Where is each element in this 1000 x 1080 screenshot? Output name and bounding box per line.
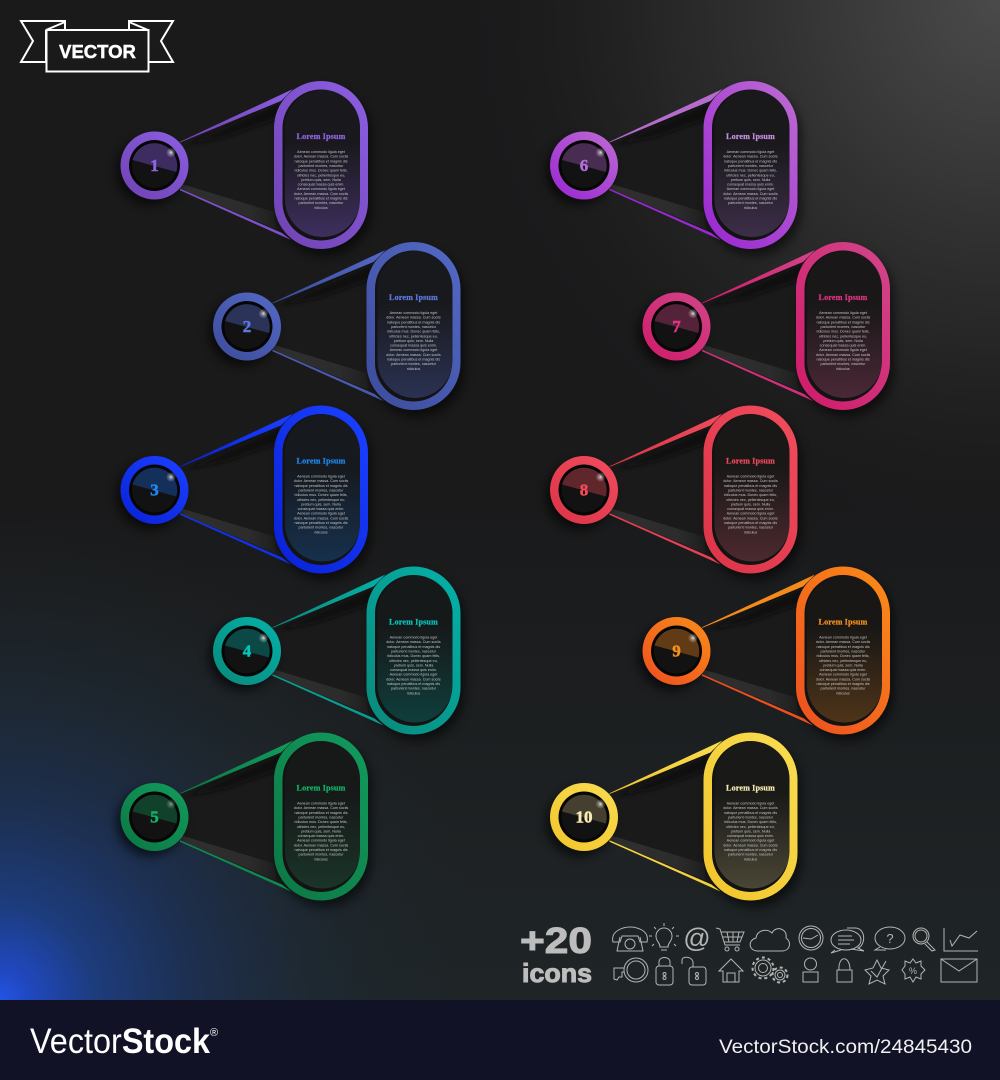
panel: step 9: ridiculus — [836, 691, 850, 695]
panel: step 3: ridiculus — [314, 530, 328, 534]
icon set — [613, 923, 978, 985]
panel: step 5: natoque penatibus et magnis dis — [294, 848, 348, 852]
icon: open padlock — [682, 957, 706, 985]
panel: step 4: ultricies nec, pellentesque eu, — [389, 659, 438, 663]
panel: step 8: parturient montes, nascetur — [728, 488, 774, 492]
icon: percent badge — [902, 959, 925, 982]
heading: +20 icons — [520, 920, 592, 988]
panel: step 5: pretium quis, sem. Nulla — [301, 829, 342, 833]
panel: step 3: 3 — [150, 480, 159, 500]
panel: step 2: natoque penatibus et magnis dis — [387, 358, 440, 362]
panel: step 6: parturient montes, nascetur — [728, 164, 774, 168]
panel: step 7: consequat massa quis enim. — [820, 344, 866, 348]
panel: step 2: Lorem Ipsum — [389, 293, 438, 302]
panel: step 8: ridiculus — [744, 530, 757, 534]
panel: step 6: consequat massa quis enim. — [727, 183, 774, 187]
panel: step 1: 1 — [150, 156, 159, 175]
panel: step 9: dolor. Aenean massa. Cum sociis — [816, 677, 870, 681]
panel: step 3: consequat massa quis enim. — [298, 507, 344, 511]
panel: step 4: Lorem Ipsum — [389, 618, 438, 626]
panel: step 4: natoque penatibus et magnis dis — [387, 682, 440, 686]
panel: step 1: ultricies nec, pellentesque eu, — [297, 173, 345, 177]
panel: step 7: Lorem Ipsum — [819, 293, 868, 302]
panel: step 10: dolor. Aenean massa. Cum sociis — [723, 843, 778, 847]
panel: step 8: ridiculus mus. Donec quam felis, — [724, 493, 777, 497]
panel: step 5: 5 — [150, 808, 159, 826]
panel: step 4 — [208, 566, 464, 742]
icon: question bubble — [875, 927, 905, 950]
panel: step 1 — [116, 81, 372, 256]
icon: percent badge: % — [909, 966, 917, 976]
panel: step 6 — [546, 81, 802, 256]
panel: step 9: Aenean commodo ligula eget — [819, 673, 867, 677]
panel: step 3: Aenean commodo ligula eget — [297, 512, 345, 516]
panel: step 10 — [546, 732, 802, 908]
panel: step 1: Aenean commodo ligula eget — [297, 187, 345, 191]
panel: step 2: dolor. Aenean massa. Cum sociis — [386, 353, 441, 357]
icon: clock — [799, 926, 823, 950]
panel: step 8: ultricies nec, pellentesque eu, — [726, 498, 775, 502]
footer bar — [0, 1000, 1000, 1080]
icon: cloud — [750, 929, 789, 951]
panel: step 6: Lorem Ipsum — [726, 132, 775, 141]
icon: question bubble: ? — [886, 931, 894, 946]
panel: step 9: consequat massa quis enim. — [820, 668, 866, 672]
panel: step 2 — [208, 242, 464, 417]
panel: step 10: natoque penatibus et magnis dis — [724, 811, 777, 815]
panel: step 4: natoque penatibus et magnis dis — [387, 645, 440, 649]
icon: star with check — [865, 960, 889, 984]
panel: step 3: pretium quis, sem. Nulla — [301, 502, 342, 506]
panel: step 1: Lorem Ipsum — [297, 132, 346, 141]
logo: VectorStock: VectorStock — [30, 1022, 210, 1061]
panel: step 10: consequat massa quis enim. — [727, 834, 774, 838]
panel: step 2: 2 — [243, 317, 251, 336]
panel: step 5: dolor. Aenean massa. Cum sociis — [294, 843, 348, 847]
icon: key — [614, 958, 648, 982]
panel: step 8: consequat massa quis enim. — [727, 507, 774, 511]
panel: step 1: Aenean commodo ligula eget — [297, 150, 345, 154]
panel: step 6: 6 — [580, 156, 588, 175]
panel: step 5: dolor. Aenean massa. Cum sociis — [294, 806, 348, 810]
icon: line chart — [944, 928, 978, 951]
panel: step 5 — [116, 732, 372, 908]
panel: step 1: natoque penatibus et magnis dis — [294, 196, 348, 200]
panel: step 8: dolor. Aenean massa. Cum sociis — [723, 516, 778, 520]
panel: step 1: dolor. Aenean massa. Cum sociis — [294, 155, 348, 159]
icon: gears — [752, 958, 788, 982]
panel: step 2: ridiculus — [407, 367, 420, 371]
icon: house — [719, 959, 743, 982]
panel: step 8: Aenean commodo ligula eget — [727, 512, 774, 516]
panel: step 4: Aenean commodo ligula eget — [390, 673, 437, 677]
panel: step 5: ridiculus mus. Donec quam felis, — [294, 820, 348, 824]
panel: step 7: ridiculus — [836, 367, 850, 371]
panel: step 2: natoque penatibus et magnis dis — [387, 320, 440, 324]
panel: step 7: ultricies nec, pellentesque eu, — [819, 334, 867, 338]
panel: step 3: ultricies nec, pellentesque eu, — [297, 498, 345, 502]
panel: step 8: dolor. Aenean massa. Cum sociis — [723, 479, 778, 483]
panel: step 5: parturient montes, nascetur — [299, 815, 344, 819]
icon: woman — [837, 959, 852, 982]
panel: step 4: ridiculus — [407, 691, 420, 695]
panel: step 3: natoque penatibus et magnis dis — [294, 521, 348, 525]
panel: step 3 — [116, 406, 372, 580]
panel: step 6: ultricies nec, pellentesque eu, — [726, 173, 775, 177]
panel: step 9: ridiculus mus. Donec quam felis, — [816, 654, 870, 658]
panel: step 3: dolor. Aenean massa. Cum sociis — [294, 479, 348, 483]
panel: step 7: natoque penatibus et magnis dis — [816, 320, 870, 324]
panel: step 10: Aenean commodo ligula eget — [727, 839, 774, 843]
panel: step 10: ridiculus mus. Donec quam felis, — [724, 820, 777, 824]
icon: envelope — [941, 959, 977, 982]
panel: step 6: ridiculus — [744, 206, 757, 210]
panel: step 2: parturient montes, nascetur — [391, 325, 437, 329]
panel: step 9: natoque penatibus et magnis dis — [816, 645, 870, 649]
icon: closed padlock — [656, 958, 673, 985]
panel: step 1: ridiculus mus. Donec quam felis, — [294, 169, 348, 173]
panel: step 8: natoque penatibus et magnis dis — [724, 521, 777, 525]
panel: step 10: dolor. Aenean massa. Cum sociis — [723, 806, 778, 810]
panel: step 4: dolor. Aenean massa. Cum sociis — [386, 677, 441, 681]
panel: step 8: Lorem Ipsum — [726, 456, 775, 466]
icon: telephone — [613, 927, 647, 951]
panel: step 2: ridiculus mus. Donec quam felis, — [387, 330, 440, 334]
panel: step 6: natoque penatibus et magnis dis — [724, 196, 777, 200]
panel: step 7: Aenean commodo ligula eget — [819, 311, 867, 315]
panel: step 1: ridiculus — [314, 206, 328, 210]
panel: step 5: Aenean commodo ligula eget — [297, 839, 345, 843]
icon: shopping cart — [716, 928, 744, 951]
logo: registered mark: ® — [210, 1027, 218, 1039]
panel: step 2: parturient montes, nascetur — [391, 362, 437, 366]
panel: step 9: 9 — [672, 642, 681, 660]
panel: step 3: parturient montes, nascetur — [299, 488, 344, 492]
panel: step 9: Aenean commodo ligula eget — [819, 636, 867, 640]
panel: step 9: Lorem Ipsum — [819, 618, 868, 626]
panel: step 1: parturient montes, nascetur — [299, 201, 344, 205]
panel: step 9: ultricies nec, pellentesque eu, — [819, 659, 867, 663]
panel: step 3: Aenean commodo ligula eget — [297, 474, 345, 478]
panel: step 10: 10 — [576, 808, 592, 826]
ribbon badge: VECTOR — [21, 21, 173, 72]
panel: step 6: parturient montes, nascetur — [728, 201, 774, 205]
panel: step 7 — [638, 242, 894, 417]
panel: step 7: parturient montes, nascetur — [821, 325, 866, 329]
heading: +20 icons: icons — [522, 958, 592, 988]
panel: step 5: consequat massa quis enim. — [298, 834, 344, 838]
panel: step 1: consequat massa quis enim. — [298, 183, 344, 187]
panel: step 6: Aenean commodo ligula eget — [727, 150, 774, 154]
panel: step 1: natoque penatibus et magnis dis — [294, 159, 348, 163]
panel: step 10: parturient montes, nascetur — [728, 815, 774, 819]
heading: +20 icons: +20 — [520, 920, 592, 961]
panel: step 4: parturient montes, nascetur — [391, 649, 437, 653]
panel: step 6: natoque penatibus et magnis dis — [724, 159, 777, 163]
panel: step 3: natoque penatibus et magnis dis — [294, 484, 348, 488]
panel: step 4: ridiculus mus. Donec quam felis, — [387, 654, 440, 658]
panel: step 1: dolor. Aenean massa. Cum sociis — [294, 192, 348, 196]
panel: step 3: ridiculus mus. Donec quam felis, — [294, 493, 348, 497]
panel: step 6: dolor. Aenean massa. Cum sociis — [723, 192, 778, 196]
panel: step 6: ridiculus mus. Donec quam felis, — [724, 169, 777, 173]
panel: step 5: natoque penatibus et magnis dis — [294, 811, 348, 815]
panel: step 1: pretium quis, sem. Nulla — [301, 178, 342, 182]
panel: step 6: Aenean commodo ligula eget — [727, 187, 774, 191]
icon: at sign: @ — [683, 923, 711, 953]
panel: step 10: Aenean commodo ligula eget — [727, 802, 774, 806]
panel: step 6: pretium quis, sem. Nulla — [731, 178, 771, 182]
panel: step 9 — [638, 566, 894, 742]
icon: light bulb — [649, 923, 679, 950]
panel: step 4: pretium quis, sem. Nulla — [394, 663, 434, 667]
panel: step 8: 8 — [580, 480, 588, 500]
icon: magnifier — [913, 928, 935, 951]
panel: step 4: parturient montes, nascetur — [391, 687, 437, 691]
footer id text: VectorStock.com/24845430 — [719, 1036, 972, 1058]
panel: step 2: consequat massa quis enim. — [390, 344, 437, 348]
panel: step 4: 4 — [243, 642, 252, 660]
panel: step 5: Aenean commodo ligula eget — [297, 802, 345, 806]
panel: step 10: ridiculus — [744, 857, 757, 861]
panel: step 10: pretium quis, sem. Nulla — [731, 829, 771, 833]
icon: chat bubbles — [831, 928, 864, 953]
panel: step 3: Lorem Ipsum — [297, 456, 346, 466]
panel: step 7: 7 — [672, 317, 681, 336]
panel: step 7: parturient montes, nascetur — [821, 362, 866, 366]
panel: step 2: pretium quis, sem. Nulla — [394, 339, 434, 343]
panel: step 5: ridiculus — [314, 857, 328, 861]
panel: step 8: Aenean commodo ligula eget — [727, 474, 774, 478]
panel: step 7: Aenean commodo ligula eget — [819, 348, 867, 352]
panel: step 10: ultricies nec, pellentesque eu, — [726, 825, 775, 829]
panel: step 7: natoque penatibus et magnis dis — [816, 358, 870, 362]
panel: step 4: Aenean commodo ligula eget — [390, 636, 437, 640]
panel: step 2: Aenean commodo ligula eget — [390, 348, 437, 352]
panel: step 8: pretium quis, sem. Nulla — [731, 502, 771, 506]
panel: step 4: consequat massa quis enim. — [390, 668, 437, 672]
panel: step 10: Lorem Ipsum — [726, 784, 775, 792]
panel: step 5: parturient montes, nascetur — [299, 853, 344, 857]
panel: step 5: ultricies nec, pellentesque eu, — [297, 825, 345, 829]
panel: step 9: dolor. Aenean massa. Cum sociis — [816, 640, 870, 644]
panel: step 1: parturient montes, nascetur — [299, 164, 344, 168]
panel: step 9: pretium quis, sem. Nulla — [823, 663, 864, 667]
panel: step 6: dolor. Aenean massa. Cum sociis — [723, 155, 778, 159]
panel: step 7: ridiculus mus. Donec quam felis, — [816, 330, 870, 334]
panel: step 2: Aenean commodo ligula eget — [390, 311, 437, 315]
panel: step 9: natoque penatibus et magnis dis — [816, 682, 870, 686]
icon: man — [803, 958, 818, 982]
panel: step 4: dolor. Aenean massa. Cum sociis — [386, 640, 441, 644]
panel: step 9: parturient montes, nascetur — [821, 649, 866, 653]
panel: step 7: dolor. Aenean massa. Cum sociis — [816, 353, 870, 357]
panel: step 9: parturient montes, nascetur — [821, 687, 866, 691]
ribbon badge: VECTOR: VECTOR — [59, 41, 136, 62]
panel: step 10: parturient montes, nascetur — [728, 853, 774, 857]
panel: step 2: ultricies nec, pellentesque eu, — [389, 334, 438, 338]
panel: step 5: Lorem Ipsum — [297, 784, 346, 792]
panel: step 7: dolor. Aenean massa. Cum sociis — [816, 316, 870, 320]
panel: step 2: dolor. Aenean massa. Cum sociis — [386, 316, 441, 320]
panel: step 3: dolor. Aenean massa. Cum sociis — [294, 516, 348, 520]
panel: step 3: parturient montes, nascetur — [299, 526, 344, 530]
panel: step 8: natoque penatibus et magnis dis — [724, 484, 777, 488]
panel: step 8: parturient montes, nascetur — [728, 526, 774, 530]
panel: step 7: pretium quis, sem. Nulla — [823, 339, 864, 343]
panel: step 10: natoque penatibus et magnis dis — [724, 848, 777, 852]
panel: step 8 — [546, 406, 802, 580]
